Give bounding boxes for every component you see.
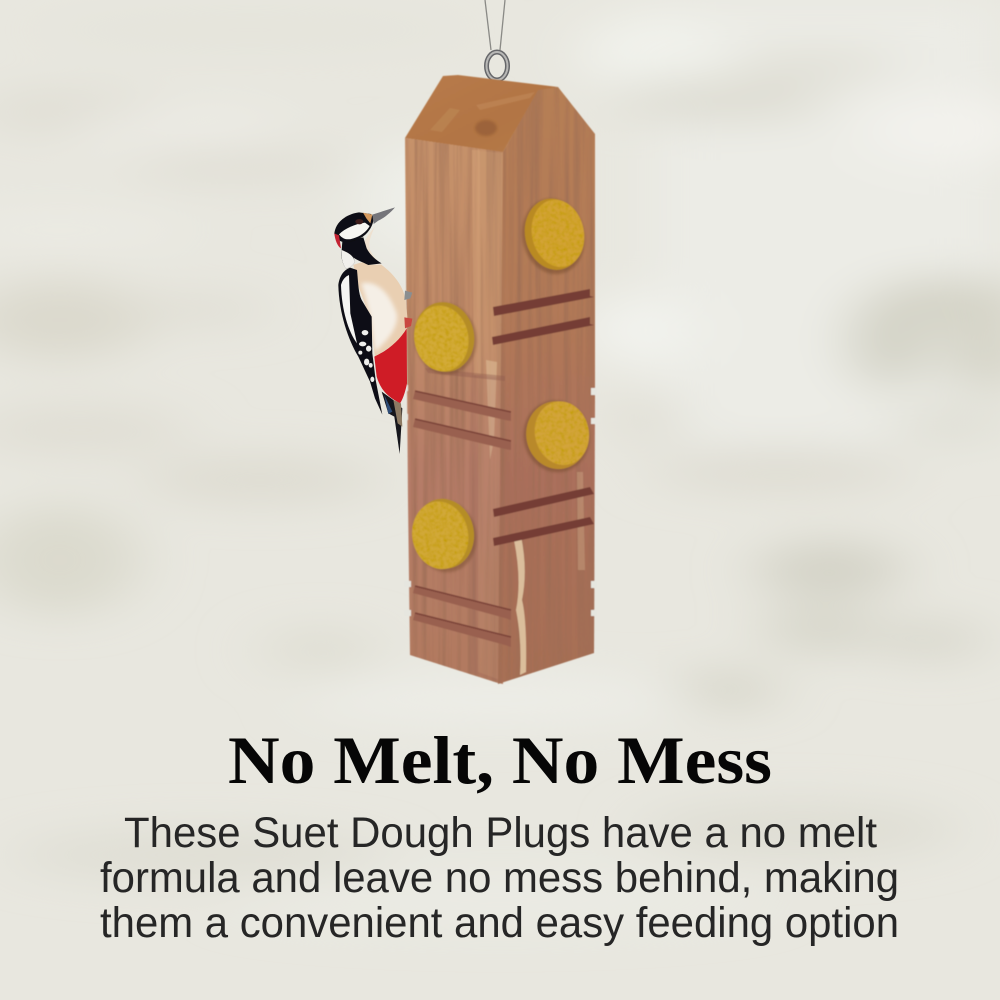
title: No Melt, No Mess [228,722,772,798]
plug: middle right [517,394,596,478]
woodpecker [334,207,412,454]
cedar feeder [402,75,597,684]
description text: These Suet Dough Plugs have a no melt [124,810,877,857]
grooves on right face [492,289,594,546]
wing [338,268,382,415]
beak [372,207,395,224]
grooves on left face [413,368,511,647]
suet dough plugs [406,193,596,578]
description text: them a convenient and easy feeding option [100,900,899,947]
hanging wire [485,0,505,50]
body [353,262,407,357]
plug: upper left [409,297,482,380]
neck markings [341,237,382,268]
description text [100,810,899,947]
description text: formula and leave no mess behind, making [100,855,899,902]
side notches [402,385,597,616]
plug: lower left [406,494,482,578]
feeder right face [498,87,595,684]
red belly [374,328,407,403]
feeder roof [405,75,558,152]
throat [363,227,382,265]
tail [382,392,402,454]
feeder left face [405,138,505,684]
metal eye hook [486,52,508,80]
plug: top right [515,193,592,280]
head [334,212,374,242]
feet [404,291,412,300]
